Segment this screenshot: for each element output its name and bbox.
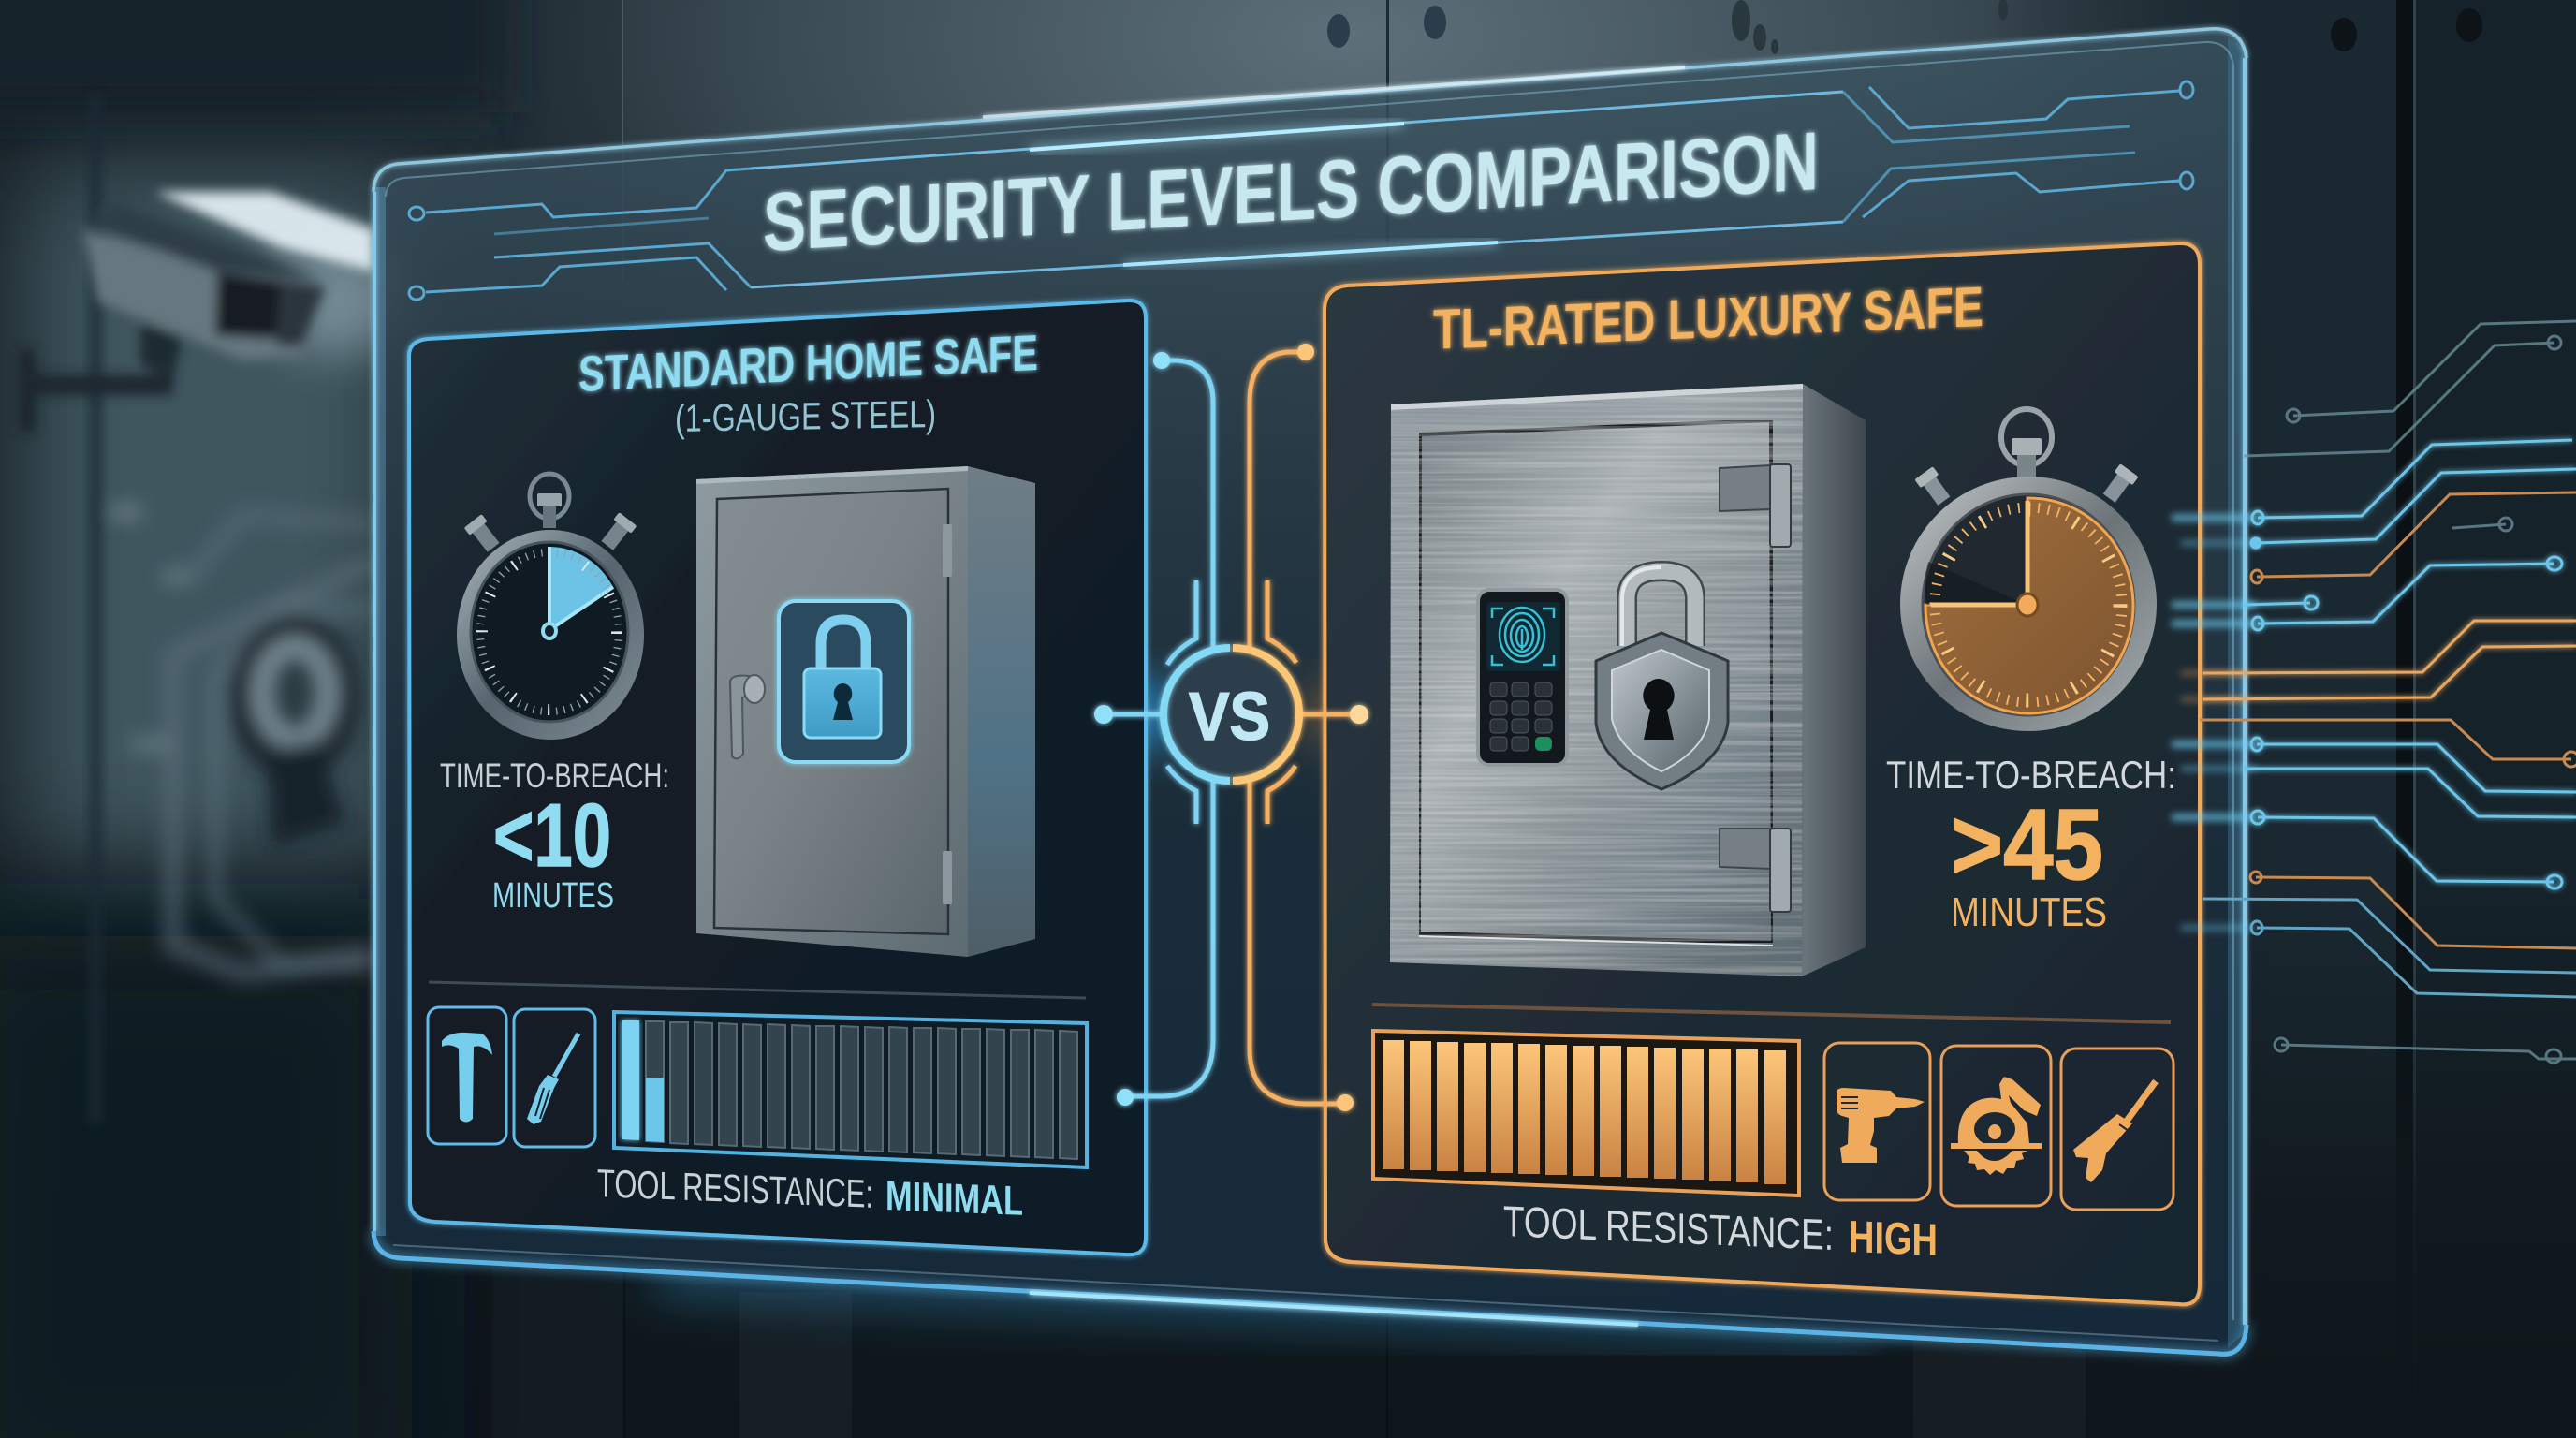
resistance value: minimal: MINIMAL (886, 1173, 1023, 1225)
edge light streaks (2172, 518, 2256, 928)
stopwatch: over 45 minutes (1900, 409, 2157, 731)
glass display panel (373, 29, 2248, 1354)
bright top streak (983, 67, 1685, 117)
time-to-breach label: TIME-TO-BREACH: (1886, 753, 2176, 797)
blurred left room background (0, 0, 505, 1438)
glass left and right edges (374, 58, 2245, 1325)
value: over 45: >45 (1951, 787, 2103, 901)
security camera blurred (19, 192, 374, 433)
tool resistance label: TOOL RESISTANCE: (597, 1161, 873, 1216)
shield padlock (1596, 567, 1728, 789)
biometric keypad (1478, 590, 1567, 765)
standard safe illustration (696, 466, 1035, 957)
vault door blurred (112, 506, 374, 974)
panel: TL-rated luxury safe (1325, 243, 2200, 1304)
minutes unit: MINUTES (492, 876, 614, 916)
time-to-breach label: TIME-TO-BREACH: (440, 756, 669, 795)
connector: orange side (1250, 344, 1368, 1111)
right circuit traces (2200, 321, 2576, 1063)
divider (429, 982, 1086, 998)
VS badge: VS (1189, 680, 1270, 755)
glass bottom edge (373, 1231, 2247, 1354)
tool resistance label: TOOL RESISTANCE: (1503, 1196, 1834, 1259)
connector: blue side (1094, 352, 1213, 1106)
divider (1372, 1005, 2171, 1022)
resistance meter: high (1373, 1031, 1799, 1196)
panel heading: TL-RATED LUXURY SAFE (1433, 275, 1983, 361)
connector glows (992, 681, 1413, 748)
value: under 10: <10 (493, 785, 611, 886)
VS badge (1164, 648, 1299, 781)
glass top edge (373, 29, 2247, 192)
title: SECURITY LEVELS COMPARISON (763, 114, 1819, 269)
panel frame (409, 301, 1146, 1255)
tool icon: hammer (428, 1007, 506, 1144)
title circuit frame (409, 81, 2193, 300)
tool icon: circular saw (1941, 1046, 2051, 1206)
tool icon: screwdriver (514, 1009, 595, 1147)
panel: standard home safe (409, 301, 1146, 1255)
bottom glass glow (655, 1278, 1872, 1329)
resistance value: high: HIGH (1849, 1212, 1938, 1266)
glowing lock tile (779, 601, 909, 762)
panel heading: STANDARD HOME SAFE (578, 325, 1038, 403)
hinges (1720, 464, 1791, 912)
glass left wall tint (373, 187, 386, 1236)
tool icon: torch gun (2061, 1049, 2174, 1210)
stopwatch: under 10 minutes (457, 474, 644, 740)
resistance meter: minimal (614, 1012, 1087, 1167)
glass right band (2228, 37, 2248, 1348)
minutes unit: MINUTES (1951, 889, 2107, 935)
panel subheading: (1-GAUGE STEEL) (675, 392, 936, 440)
panel frame (1325, 243, 2200, 1304)
luxury safe illustration (1390, 384, 1866, 976)
glass body (373, 29, 2247, 1354)
tool icon: power drill (1824, 1043, 1930, 1200)
